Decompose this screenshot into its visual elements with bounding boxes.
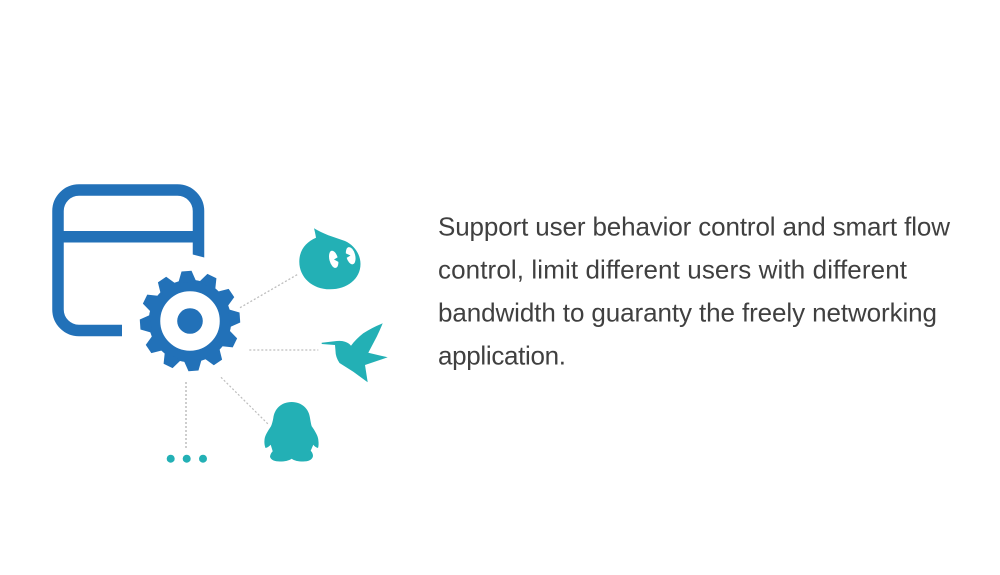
description text: bandwidth to guaranty the freely networking	[438, 298, 937, 328]
icon: teal droplet face	[299, 228, 360, 289]
description text: control, limit different users with different	[438, 254, 908, 284]
description text: Support user behavior control and smart flow	[438, 212, 950, 242]
icon: gear	[139, 270, 241, 372]
icon: teal hummingbird	[322, 323, 388, 382]
description text	[438, 212, 950, 370]
description text: application.	[438, 340, 566, 370]
dotted connector lines	[186, 274, 318, 450]
icon: three dots	[167, 455, 207, 463]
icon: browser window frame	[58, 190, 204, 330]
icon: teal penguin	[264, 402, 319, 462]
